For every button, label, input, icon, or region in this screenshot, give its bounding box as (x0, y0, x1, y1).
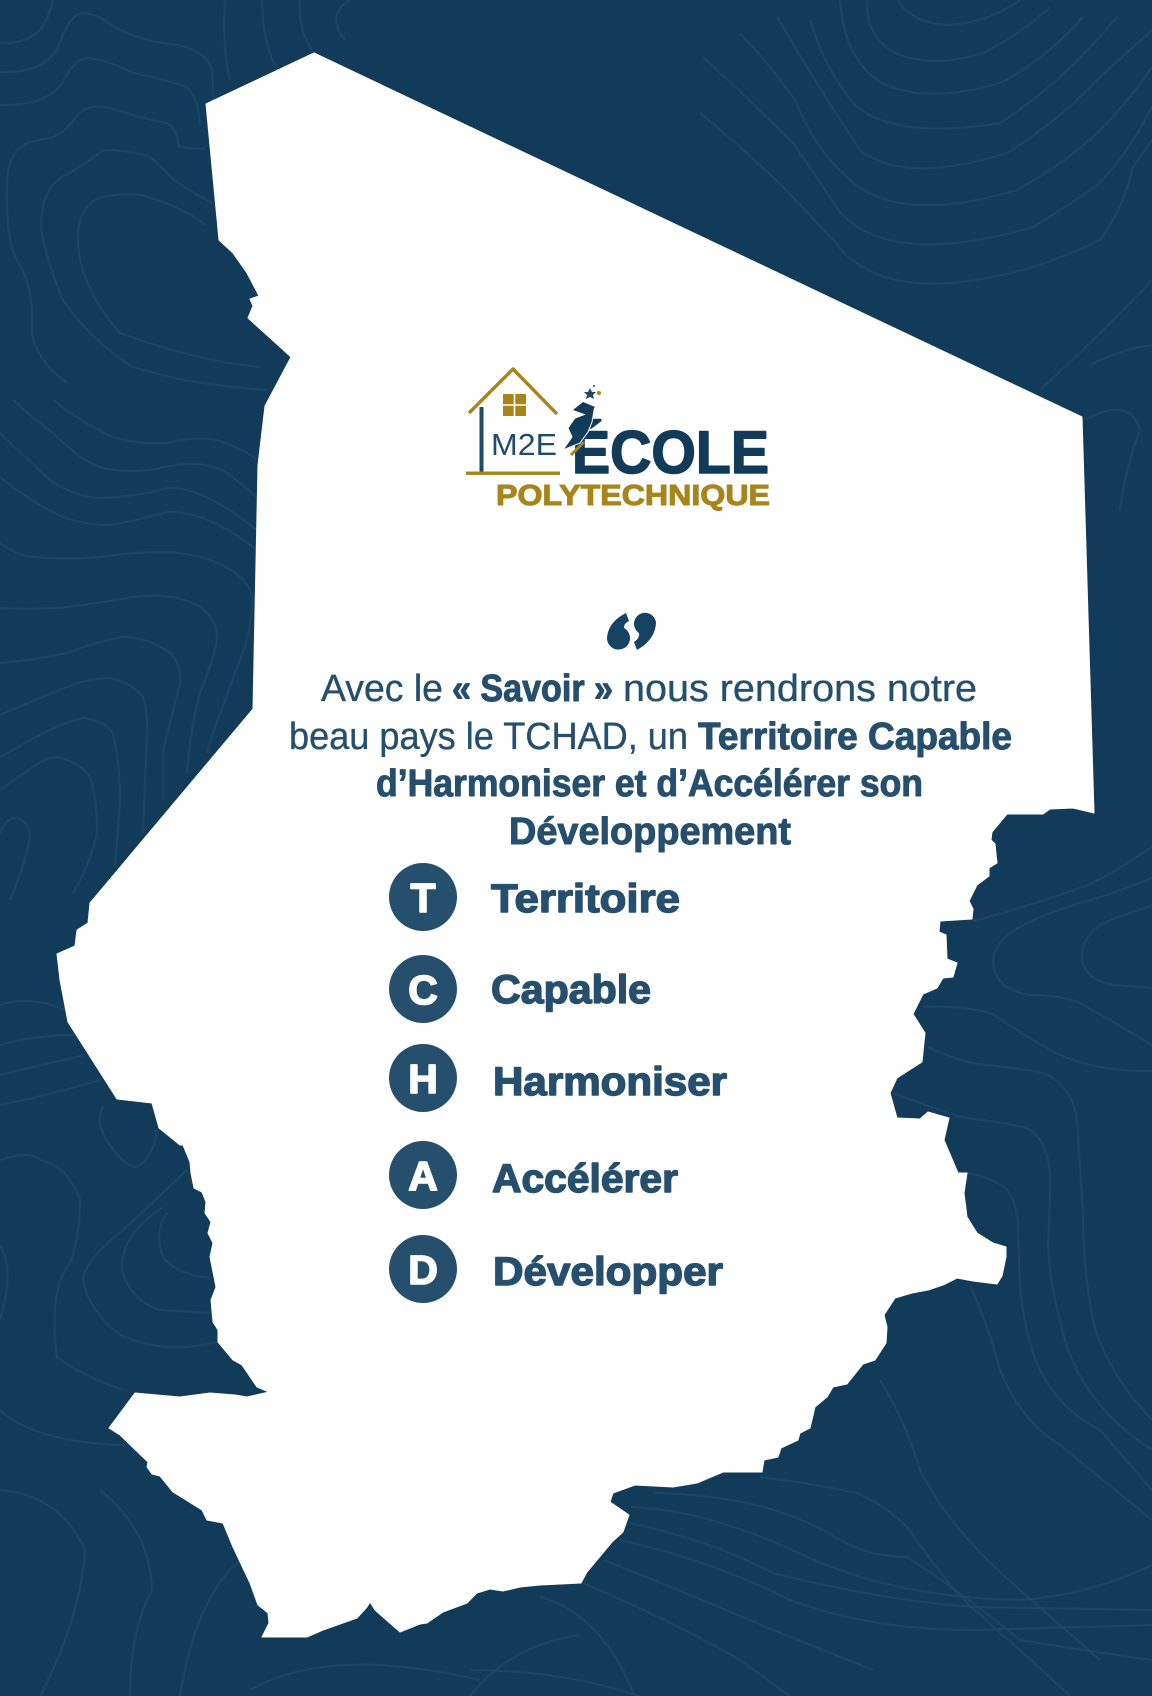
ÉCOLE wordmark: ÉCOLE (572, 419, 769, 486)
TCHAD list (389, 863, 727, 1303)
POLYTECHNIQUE wordmark: POLYTECHNIQUE (496, 480, 770, 512)
quote text (289, 668, 1012, 853)
house window (503, 394, 526, 416)
item: T Territoire (389, 863, 680, 931)
item: A Accélérer: A (408, 1153, 438, 1199)
logo: M2E École Polytechnique (466, 369, 770, 512)
house roof (469, 369, 557, 414)
quote line 1: « Savoir » (452, 668, 613, 710)
item: C Capable (389, 955, 651, 1023)
item: C Capable: Capable (491, 968, 651, 1012)
item: A Accélérer: Accélérer (492, 1157, 678, 1201)
quote line 2: Territoire Capable (698, 716, 1012, 758)
quote line 2 (289, 716, 1012, 758)
quote line 1: nous rendrons notre (623, 668, 977, 710)
house wall (480, 407, 484, 472)
quote line 1 (321, 668, 977, 710)
icon: quotation mark (607, 613, 656, 650)
item: A Accélérer (389, 1141, 678, 1209)
item: C Capable: C (408, 967, 438, 1013)
quote line 4: Développement (509, 811, 791, 853)
quote line 3: d’Harmoniser et d’Accélérer son (376, 763, 923, 805)
house base (466, 472, 560, 475)
item: D Développer: Développer (493, 1250, 723, 1294)
item: H Harmoniser: H (408, 1056, 438, 1102)
item: H Harmoniser (389, 1044, 727, 1112)
quote line 1: Avec le (321, 668, 443, 710)
M2E lettering: M2E (491, 427, 557, 462)
item: D Développer (389, 1235, 723, 1303)
item: D Développer: D (408, 1247, 438, 1293)
icon: graduate reaching for stars (563, 385, 601, 455)
item: T Territoire: Territoire (491, 877, 680, 921)
item: H Harmoniser: Harmoniser (493, 1060, 727, 1104)
item: T Territoire: T (410, 875, 436, 921)
quote line 2: beau pays le TCHAD, un (289, 716, 688, 758)
